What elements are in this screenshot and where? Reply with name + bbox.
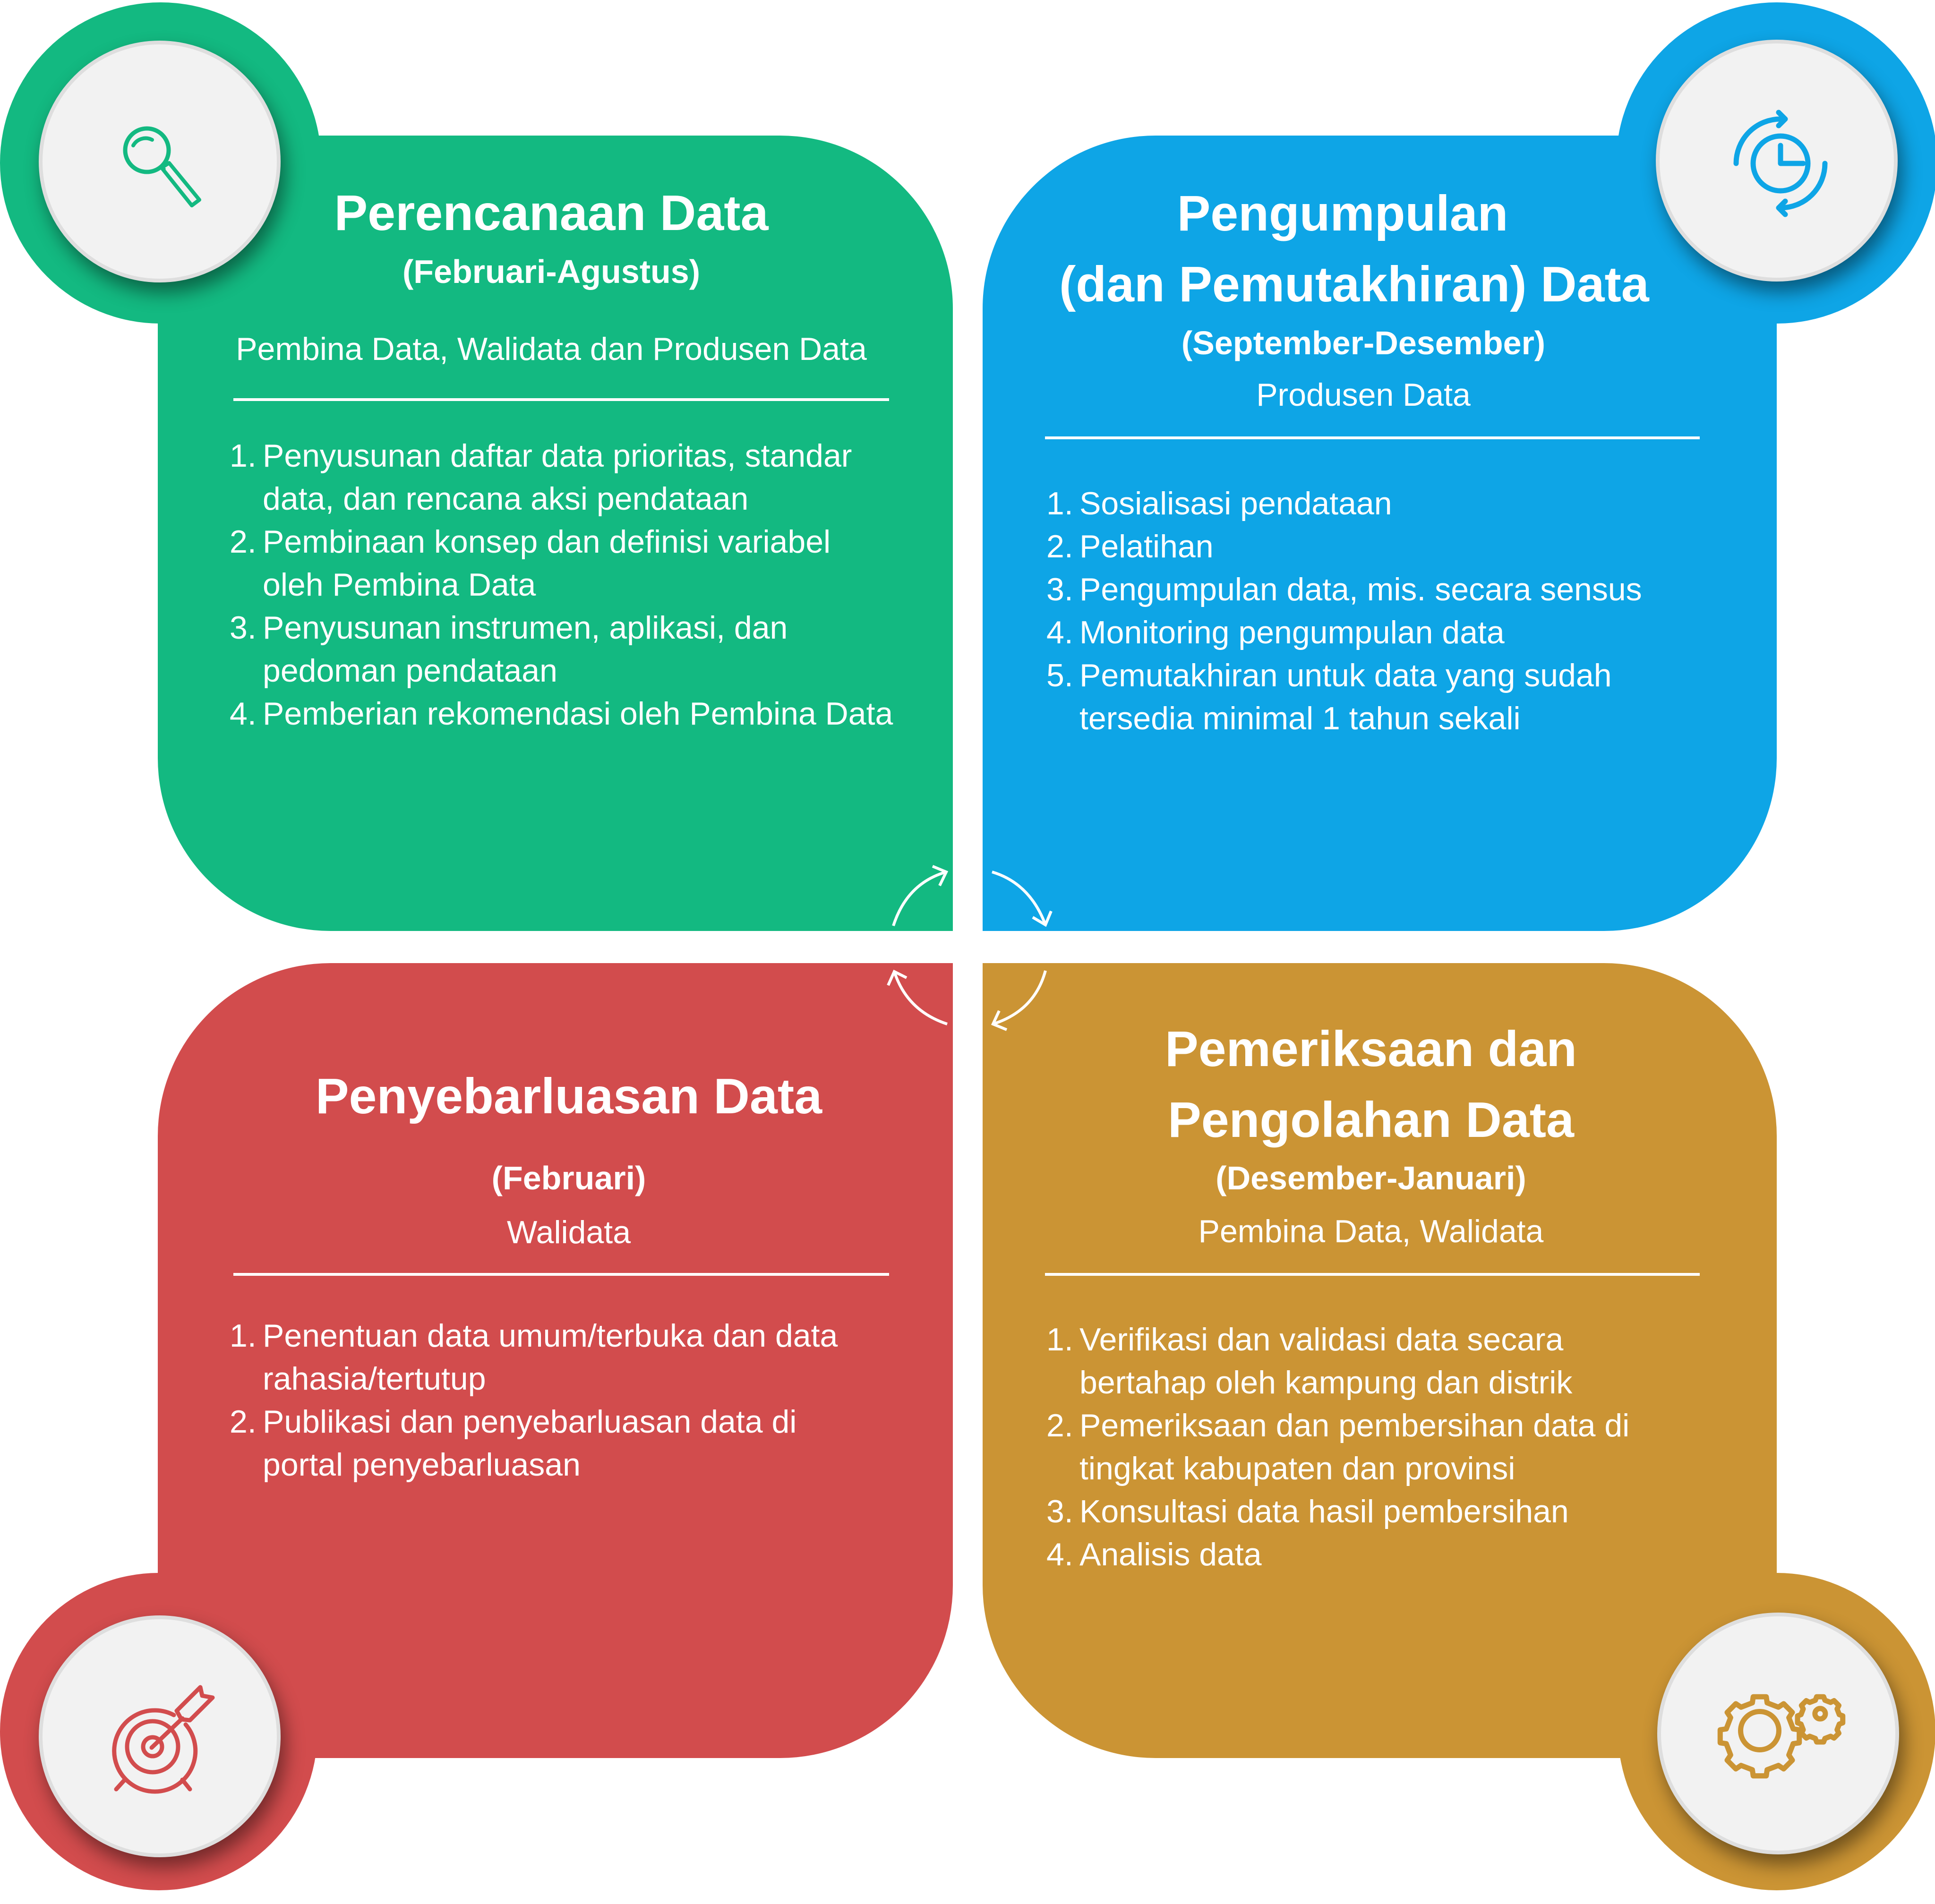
icon: magnifier [39, 41, 281, 282]
list: gold: 1. [1046, 1322, 1073, 1358]
list: gold: 2. [1046, 1408, 1073, 1443]
roles: red: Walidata [507, 1214, 631, 1250]
list: green: oleh Pembina Data [263, 567, 536, 603]
list: green: Penyusunan daftar data prioritas, standar [263, 438, 852, 474]
list: gold: 3. [1046, 1494, 1073, 1529]
heading: blue [1059, 178, 1626, 320]
list: blue: 5. [1046, 657, 1073, 693]
list: green: 1. [230, 438, 257, 474]
heading: blue: (dan Pemutakhiran) Data [1059, 256, 1649, 312]
subheading: gold: (Desember-Januari) [1216, 1160, 1526, 1196]
list: blue: Sosialisasi pendataan [1079, 486, 1392, 521]
list: blue: Pelatihan [1079, 529, 1214, 564]
roles: green: Pembina Data, Walidata dan Produsen Data [236, 331, 867, 367]
list: blue: 3. [1046, 572, 1073, 607]
list: blue: Pemutakhiran untuk data yang sudah [1079, 657, 1612, 693]
circle: red [0, 1573, 317, 1890]
list: red: 2. [230, 1404, 257, 1440]
roles: gold: Pembina Data, Walidata [1199, 1213, 1543, 1249]
list: blue: Pengumpulan data, mis. secara sensus [1079, 572, 1642, 607]
heading: blue: Pengumpulan [1177, 186, 1508, 241]
panel: green [158, 136, 953, 931]
icon: clock refresh [1656, 40, 1898, 282]
list: blue [1046, 482, 1642, 740]
list: green: Penyusunan instrumen, aplikasi, dan [263, 610, 788, 646]
list: red: portal penyebarluasan [263, 1447, 581, 1483]
icon: target [39, 1615, 281, 1857]
list: green [230, 435, 893, 735]
list: green: pedoman pendataan [263, 653, 557, 689]
list: red: Publikasi dan penyebarluasan data di [263, 1404, 796, 1440]
list: gold: Verifikasi dan validasi data secara [1079, 1322, 1563, 1358]
list: green: 3. [230, 610, 257, 646]
panel: red [158, 963, 953, 1758]
circle: green [0, 2, 321, 324]
heading: gold: Pengolahan Data [1168, 1092, 1574, 1148]
list: blue: 2. [1046, 529, 1073, 564]
subheading: green: (Februari-Agustus) [402, 253, 700, 290]
circle: blue [1616, 2, 1935, 324]
list: gold: Konsultasi data hasil pembersihan [1079, 1494, 1569, 1529]
list: blue: 4. [1046, 615, 1073, 650]
list: green: data, dan rencana aksi pendataan [263, 481, 748, 517]
subheading: red: (Februari) [492, 1160, 646, 1196]
list: gold: 4. [1046, 1537, 1073, 1572]
list: green: 2. [230, 524, 257, 560]
subheading: blue: (September-Desember) [1182, 324, 1545, 361]
list: blue: tersedia minimal 1 tahun sekali [1079, 700, 1521, 736]
list: blue: Monitoring pengumpulan data [1079, 615, 1505, 650]
heading: gold: Pemeriksaan dan [1165, 1021, 1577, 1077]
panel: gold [983, 963, 1777, 1758]
roles: blue: Produsen Data [1256, 377, 1471, 413]
list: green: Pembinaan konsep dan definisi variabel [263, 524, 831, 560]
list: gold: Pemeriksaan dan pembersihan data di [1079, 1408, 1629, 1443]
list: gold: bertahap oleh kampung dan distrik [1079, 1365, 1572, 1400]
heading: red: Penyebarluasan Data [316, 1068, 822, 1124]
list: green: 4. [230, 696, 257, 732]
heading: gold [1087, 1014, 1654, 1155]
icon: gears [1657, 1613, 1899, 1854]
list: red [230, 1315, 838, 1486]
list: red: Penentuan data umum/terbuka dan data [263, 1318, 838, 1354]
list: red: rahasia/tertutup [263, 1361, 486, 1397]
circle: gold [1618, 1573, 1935, 1890]
list: gold [1046, 1318, 1629, 1576]
heading: green: Perencanaan Data [334, 185, 769, 241]
list: gold: Analisis data [1079, 1537, 1262, 1572]
list: gold: tingkat kabupaten dan provinsi [1079, 1451, 1515, 1486]
list: blue: 1. [1046, 486, 1073, 521]
list: green: Pemberian rekomendasi oleh Pembina Data [263, 696, 893, 732]
panel: blue [983, 136, 1777, 931]
list: red: 1. [230, 1318, 257, 1354]
